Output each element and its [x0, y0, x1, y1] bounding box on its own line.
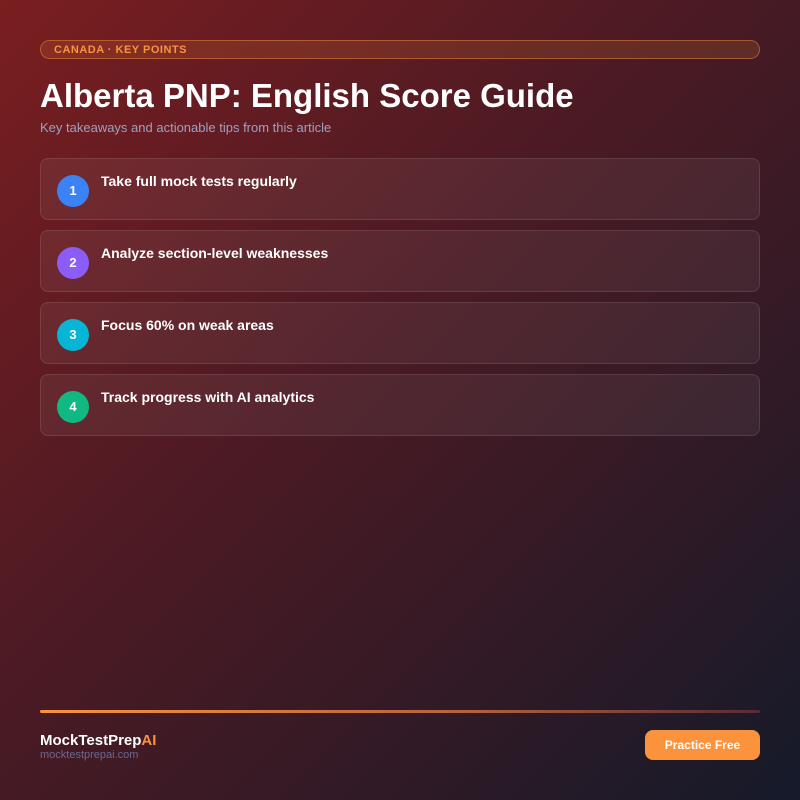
card 3: Focus 60% on weak areas [101, 317, 274, 333]
title: Alberta PNP: English Score Guide [40, 77, 574, 114]
card 2: 2 [69, 255, 77, 270]
card 3 [40, 302, 760, 364]
card 1: Take full mock tests regularly [101, 173, 297, 189]
url: mocktestprepai.com [40, 749, 138, 761]
card 2 [40, 230, 760, 292]
card 2: Analyze section-level weaknesses [101, 245, 328, 261]
button: Practice Free [665, 738, 740, 752]
tag pill: CANADA · KEY POINTS [54, 44, 187, 56]
card 1: 1 [69, 183, 77, 198]
card 1 [40, 158, 760, 220]
card 3: 3 [69, 327, 77, 342]
card 4: 4 [69, 399, 77, 414]
subtitle: Key takeaways and actionable tips from this article [40, 120, 331, 135]
card 4 [40, 374, 760, 436]
button [645, 730, 760, 760]
brand: MockTestPrepAI [40, 732, 156, 749]
card 4: Track progress with AI analytics [101, 389, 314, 405]
tag pill [40, 40, 760, 59]
